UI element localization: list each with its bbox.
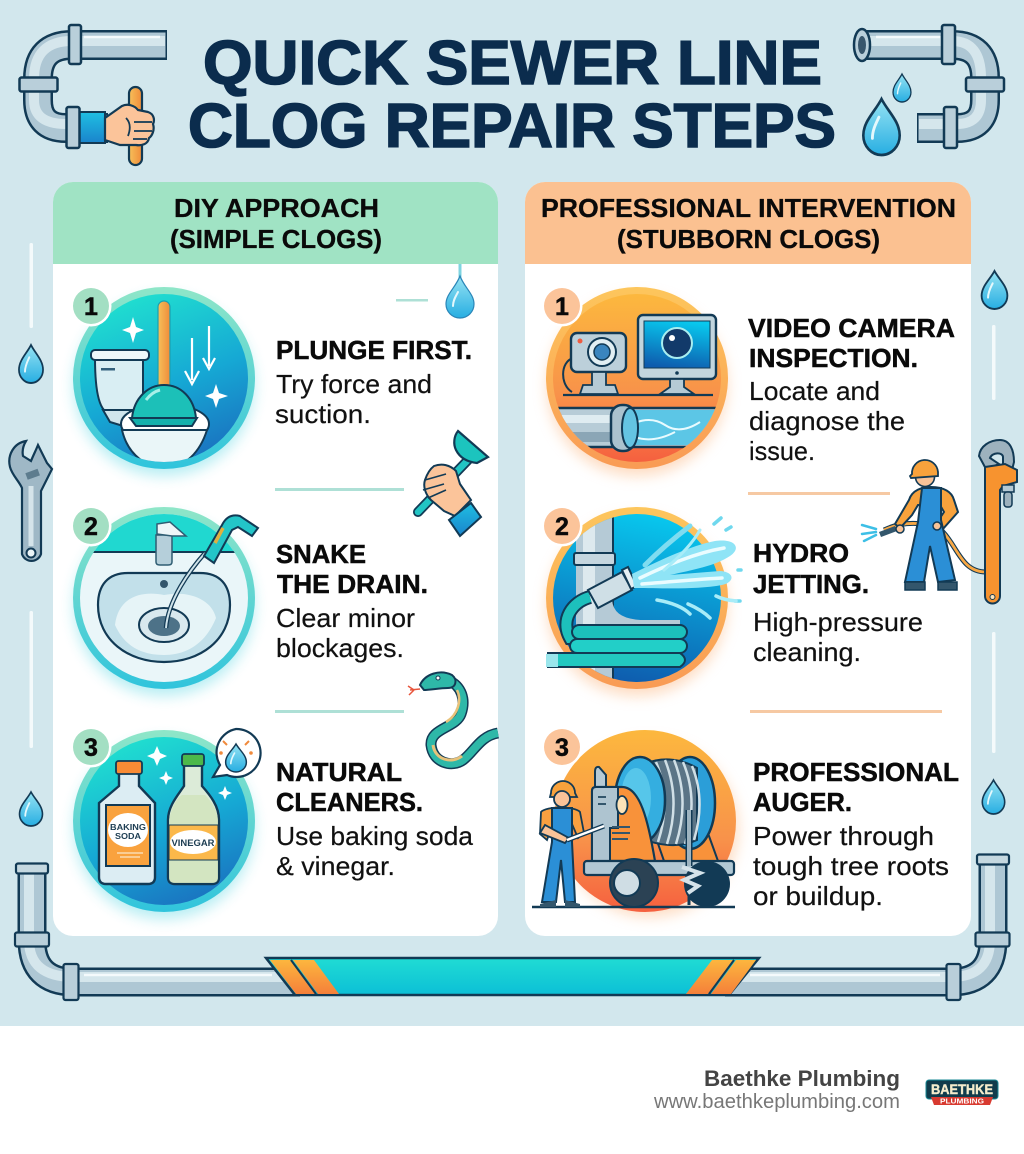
icon: sink and drain snake (70, 505, 260, 696)
text: plunge first (275, 335, 472, 429)
icon: water drop in panel (446, 264, 474, 318)
text: snake the drain: blockages. (276, 633, 404, 663)
logo: Baethke Plumbing badge: BAETHKE (931, 1081, 993, 1097)
side rail lines (30, 243, 996, 753)
badge: pro step 1 (542, 286, 582, 326)
badge: DIY step 3: 3 (84, 734, 98, 762)
heading: professional intervention: (STUBBORN CLOGS) (617, 224, 880, 254)
icon: baking soda and vinegar bottles (73, 729, 261, 919)
logo: Baethke Plumbing badge (926, 1080, 998, 1106)
badge: DIY step 2 (70, 506, 112, 546)
icon: top-right pipe with drops (854, 25, 1004, 155)
text: snake the drain: THE DRAIN. (277, 569, 428, 599)
text: professional auger: AUGER. (753, 787, 852, 817)
panel: professional intervention (525, 182, 971, 936)
text: professional auger: PROFESSIONAL (753, 757, 959, 787)
bottom teal bar with orange stripes (266, 958, 759, 995)
icon: top-left pipe with hand (20, 25, 167, 165)
badge: DIY step 3 (70, 726, 112, 768)
text: professional auger: Power through (753, 821, 934, 851)
icon: baking soda and vinegar bottles: SODA (115, 831, 141, 841)
text: video camera inspection: VIDEO CAMERA (748, 313, 955, 343)
badge: pro step 1: 1 (555, 293, 569, 321)
text: plunge first: Try force and (276, 369, 432, 399)
icon: bottom-right pipe (725, 854, 1010, 1000)
text: video camera inspection: issue. (749, 436, 815, 466)
footer brand text (653, 1066, 900, 1113)
text: natural cleaners (276, 757, 474, 881)
text: professional auger: tough tree roots (753, 851, 949, 881)
panel: DIY approach (53, 182, 498, 936)
text: snake the drain (276, 539, 428, 663)
text: video camera inspection (748, 313, 955, 466)
text: plunge first: PLUNGE FIRST. (276, 335, 472, 365)
text: hydro jetting: cleaning. (753, 637, 861, 667)
icon: power auger machine with worker (532, 730, 738, 917)
heading: professional intervention: PROFESSIONAL INTERVENTION (541, 193, 956, 223)
panel header: professional (525, 182, 971, 264)
badge: pro step 3: 3 (555, 734, 569, 762)
text: hydro jetting: JETTING. (753, 569, 869, 599)
text: professional auger: or buildup. (753, 881, 883, 911)
icon: worker with pressure hose (862, 460, 986, 590)
title: CLOG REPAIR STEPS (188, 92, 836, 161)
icon: snake (408, 672, 498, 764)
text: natural cleaners: CLEANERS. (276, 787, 423, 817)
badge: pro step 2 (542, 506, 582, 546)
badge: DIY step 2: 2 (84, 513, 98, 541)
heading: DIY approach: (SIMPLE CLOGS) (170, 224, 382, 254)
icon: hydro jetting hose and water (546, 505, 741, 696)
text: professional auger (753, 757, 959, 911)
text: natural cleaners: & vinegar. (276, 851, 395, 881)
icon: side water drops (19, 271, 1007, 826)
text: snake the drain: SNAKE (276, 539, 366, 569)
badge: DIY step 1 (70, 286, 112, 326)
icon: plunger and toilet (73, 287, 255, 476)
icon: bottom-left pipe (15, 864, 300, 1000)
badge: pro step 3 (542, 726, 582, 768)
text: video camera inspection: INSPECTION. (749, 343, 918, 373)
heading: professional intervention (541, 193, 956, 254)
icon: baking soda and vinegar bottles: BAKING (110, 822, 146, 832)
footer brand text: Baethke Plumbing (704, 1066, 900, 1091)
text: hydro jetting (753, 538, 923, 667)
text: plunge first: suction. (275, 399, 371, 429)
icon: camera and monitor (540, 287, 740, 476)
icon: baking soda and vinegar bottles: VINEGAR (172, 838, 215, 849)
text: natural cleaners: NATURAL (276, 757, 402, 787)
icon: hand holding plunger (418, 431, 488, 536)
badge: pro step 2: 2 (555, 513, 569, 541)
title: QUICK SEWER LINE (203, 29, 822, 98)
text: video camera inspection: Locate and (749, 376, 880, 406)
text: hydro jetting: High-pressure (753, 607, 923, 637)
heading: DIY approach: DIY APPROACH (174, 193, 379, 223)
text: hydro jetting: HYDRO (753, 538, 849, 568)
logo: Baethke Plumbing badge: PLUMBING (940, 1098, 985, 1106)
footer brand text: www.baethkeplumbing.com (653, 1091, 900, 1113)
text: video camera inspection: diagnose the (749, 406, 905, 436)
badge: DIY step 1: 1 (84, 293, 98, 321)
text: natural cleaners: Use baking soda (276, 821, 474, 851)
dividers (275, 299, 942, 713)
panel header: DIY (53, 182, 498, 264)
heading: DIY approach (170, 193, 382, 254)
title (188, 29, 836, 161)
icon: adjustable wrench (9, 441, 52, 561)
text: snake the drain: Clear minor (276, 603, 415, 633)
icon: orange pipe wrench (979, 440, 1017, 604)
